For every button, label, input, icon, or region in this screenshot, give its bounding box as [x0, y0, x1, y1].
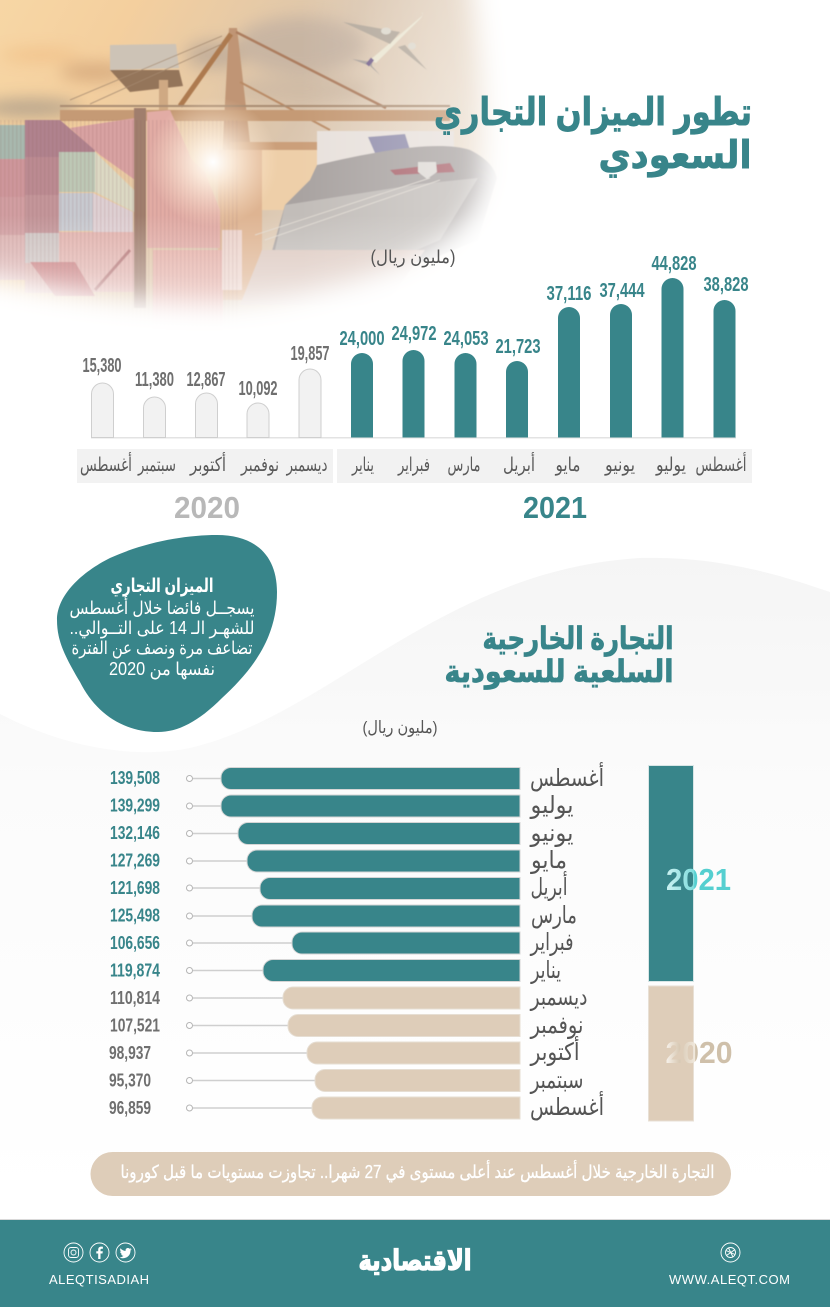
month labels: نوفمبر	[240, 455, 279, 476]
month labels: مارس	[448, 455, 480, 476]
title: trade balance: السعودي	[598, 135, 752, 177]
title: foreign merchandise trade: التجارة الخارجية	[482, 621, 674, 657]
title: foreign merchandise trade	[444, 621, 674, 690]
column values 2021: 24,972	[392, 323, 436, 345]
column values 2021: 21,723	[496, 336, 540, 358]
bar month labels: أكتوبر	[530, 1036, 580, 1066]
callout: trade balance surplus: يسجــل فائضا خلال أغسطس	[70, 596, 254, 618]
year label 2020: 2020	[174, 490, 240, 525]
sun flare	[156, 104, 271, 220]
month labels: أكتوبر	[189, 452, 226, 476]
logo wordmark: الاقتصادية	[358, 1245, 472, 1276]
bar values 2021: 139,508	[110, 768, 160, 788]
bar values 2021	[110, 768, 160, 980]
bar month labels: مارس	[531, 902, 577, 929]
title: foreign merchandise trade: السلعية للسعودية	[444, 654, 674, 690]
bar month labels: يوليو	[530, 792, 574, 819]
bar month labels: يونيو	[530, 820, 574, 847]
bar month labels: فبراير	[530, 929, 574, 956]
bar month labels: نوفمبر	[530, 1012, 584, 1039]
year block 2021	[648, 766, 731, 982]
bar values 2020: 107,521	[110, 1016, 160, 1036]
month labels: سبتمبر	[137, 455, 176, 476]
month labels: أبريل	[503, 452, 535, 476]
month labels: يونيو	[604, 455, 635, 476]
callout: trade balance surplus: الميزان التجاري	[110, 576, 214, 598]
column values 2021: 24,000	[340, 328, 384, 350]
plane	[344, 17, 426, 74]
leader dots	[186, 776, 192, 1111]
white wash overlays	[330, 0, 492, 252]
bar month labels: سبتمبر	[530, 1067, 584, 1094]
social handle: ALEQTISADIAH	[49, 1272, 149, 1287]
bar month labels: أبريل	[530, 871, 568, 901]
column values 2021: 38,828	[704, 274, 748, 296]
bar values 2021: 125,498	[110, 906, 160, 926]
2021 columns	[351, 278, 736, 438]
column values 2020: 10,092	[238, 378, 278, 400]
month labels: أغسطس	[80, 452, 132, 476]
year block 2021: 2021	[666, 862, 731, 897]
year block 2020: 2020	[666, 1035, 732, 1070]
bar values 2020: 95,370	[109, 1070, 151, 1090]
hero photo: port, containers, ship and plane	[0, 0, 496, 316]
leader lines	[193, 778, 315, 1108]
column chart: monthly trade balance	[82, 253, 748, 438]
column values 2020: 11,380	[135, 369, 174, 391]
icon: twitter	[116, 1243, 135, 1262]
column values 2021	[340, 253, 748, 358]
month labels: مايو	[555, 455, 580, 476]
note pill	[90, 1152, 731, 1196]
unit label: million riyals: (مليون ريال)	[362, 718, 438, 737]
title: trade balance: تطور الميزان التجاري	[434, 92, 752, 134]
bar month labels: مايو	[530, 847, 567, 874]
icon: facebook	[90, 1243, 109, 1262]
column values 2020	[82, 343, 330, 400]
month strip 2021	[337, 449, 752, 483]
crane	[60, 28, 450, 300]
column values 2021: 37,444	[600, 280, 645, 302]
bar values 2021: 132,146	[110, 823, 160, 843]
bar month labels: ديسمبر	[530, 984, 588, 1011]
year block 2020	[648, 986, 732, 1121]
column values 2020: 12,867	[186, 369, 226, 391]
bar month labels: يناير	[530, 957, 561, 984]
bar month labels: أغسطس	[530, 1091, 604, 1121]
month labels: يوليو	[655, 455, 686, 476]
callout: trade balance surplus: تضاعف مرة ونصف عن الفترة	[72, 638, 252, 659]
2021 bars	[221, 768, 520, 982]
month labels: أغسطس	[696, 452, 746, 476]
note pill: التجارة الخارجية خلال أغسطس عند أعلى مستوى في 27 شهرا.. تجاوزت مستويات ما قبل كورونا	[120, 1160, 714, 1183]
baseline	[91, 437, 736, 438]
bar month labels: أغسطس	[530, 762, 604, 792]
containers	[0, 108, 242, 330]
month labels: ديسمبر	[286, 455, 328, 476]
bar values 2020	[109, 988, 160, 1118]
column values 2021: 44,828	[652, 253, 696, 275]
column values 2020: 19,857	[290, 343, 330, 365]
bar values 2021: 106,656	[110, 933, 160, 953]
bar values 2021: 119,874	[110, 960, 160, 980]
bar chart: foreign merchandise trade by month	[109, 762, 604, 1121]
ship	[240, 131, 497, 305]
icon: website	[721, 1243, 740, 1262]
bar values 2021: 121,698	[110, 878, 160, 898]
bar values 2020: 96,859	[109, 1098, 151, 1118]
clouds	[0, 17, 370, 117]
bar values 2020: 98,937	[109, 1043, 151, 1063]
column values 2020: 15,380	[82, 355, 122, 377]
callout: trade balance surplus: للشهـر الـ 14 على التــوالي..	[70, 618, 254, 639]
icon: instagram	[64, 1243, 83, 1262]
unit label: million riyals: (مليون ريال)	[370, 247, 456, 268]
month labels	[80, 452, 746, 476]
month strip 2020	[77, 449, 333, 483]
month labels: فبراير	[397, 455, 430, 476]
bar values 2021: 139,299	[110, 796, 160, 816]
2020 bars	[283, 987, 520, 1119]
column values 2021: 37,116	[546, 283, 592, 305]
bar month labels	[530, 762, 604, 1121]
month labels: يناير	[351, 455, 374, 476]
title: trade balance	[434, 92, 752, 177]
2020 columns	[92, 369, 321, 438]
year label 2021: 2021	[523, 490, 587, 525]
bar values 2020: 110,814	[110, 988, 160, 1008]
callout: trade balance surplus: نفسها من 2020	[109, 659, 215, 680]
website address: WWW.ALEQT.COM	[669, 1272, 790, 1287]
column values 2021: 24,053	[444, 328, 488, 350]
bar values 2021: 127,269	[110, 850, 160, 870]
callout: trade balance surplus	[57, 535, 277, 732]
background swoosh	[0, 558, 830, 1200]
footer	[0, 1219, 830, 1307]
